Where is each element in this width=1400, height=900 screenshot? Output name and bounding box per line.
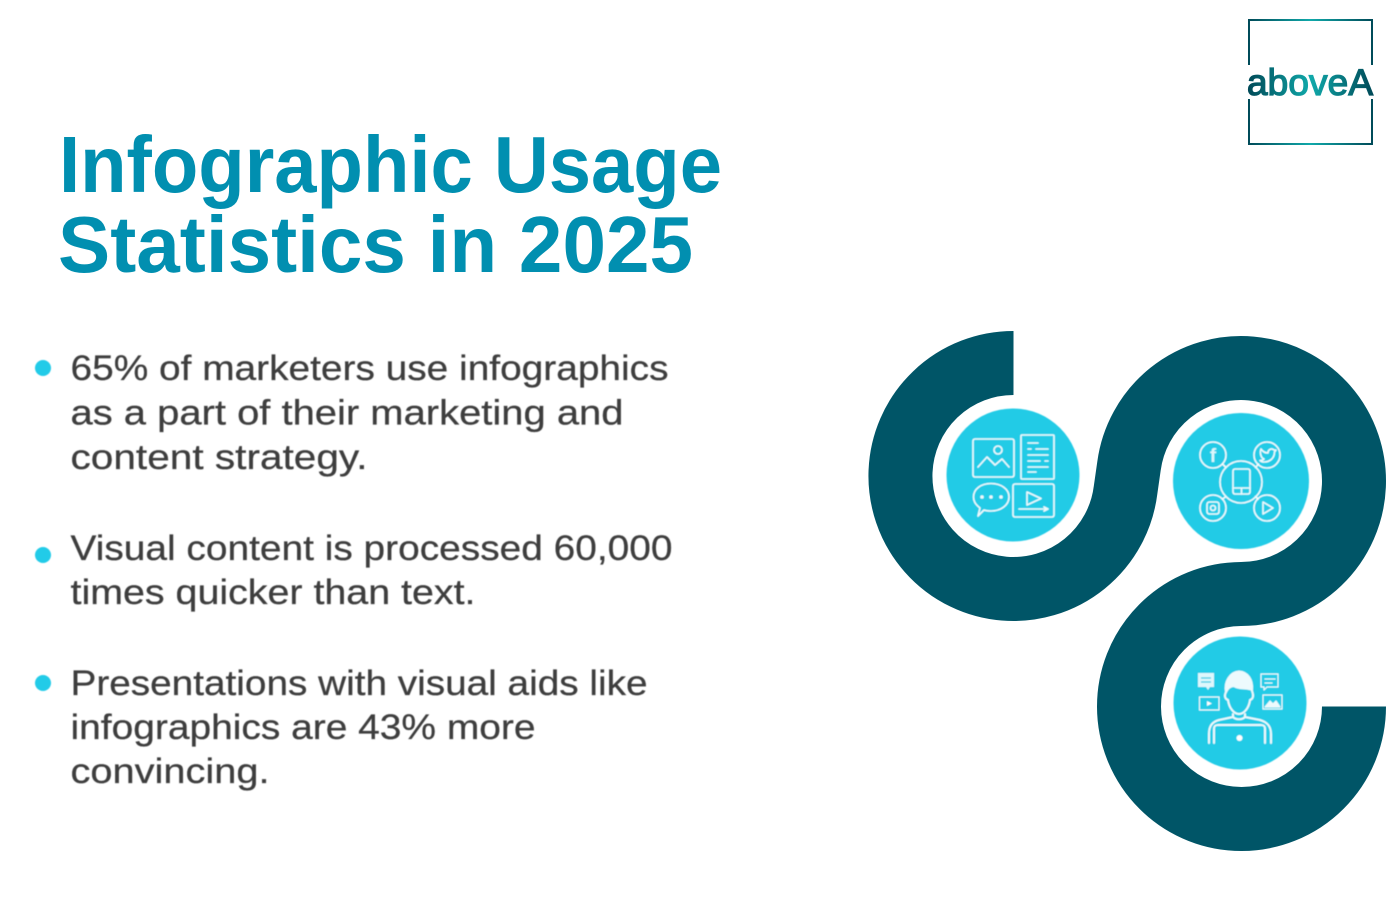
play button	[1254, 495, 1280, 521]
facebook glyph: f	[1210, 446, 1217, 467]
person	[1209, 672, 1271, 743]
instagram	[1200, 495, 1226, 521]
icon circle: social media	[1173, 413, 1309, 549]
logo: aboveA	[1247, 20, 1373, 144]
bullet 3: convincing.	[70, 752, 270, 791]
twitter	[1254, 442, 1280, 468]
bullet 1: content strategy.	[70, 438, 368, 477]
chat bubble	[974, 484, 1009, 516]
small image	[1263, 695, 1282, 709]
bullet 1: 65% of marketers use infographics	[70, 349, 668, 388]
title	[58, 120, 722, 289]
bullet 3: Presentations with visual aids like	[70, 664, 648, 703]
filled message	[1198, 673, 1214, 690]
title line 1: Infographic Usage	[59, 120, 722, 209]
message lines	[1201, 678, 1211, 682]
bullet 2	[35, 529, 672, 612]
bullet 1	[35, 349, 668, 477]
ribbon graphic with icons	[900, 363, 1354, 819]
icon circle: visual content	[946, 408, 1080, 542]
picture frame	[973, 439, 1014, 477]
bullet 3	[35, 664, 648, 791]
bullet 1: as a part of their marketing and	[70, 394, 624, 432]
small video	[1200, 697, 1219, 710]
video player	[1013, 484, 1054, 517]
bullet 2: Visual content is processed 60,000	[70, 529, 672, 568]
video play	[1207, 701, 1212, 706]
laptop dot	[1236, 735, 1242, 741]
logo wordmark: aboveA	[1247, 62, 1373, 103]
facebook	[1200, 442, 1226, 468]
phone hub	[1220, 461, 1262, 503]
document	[1021, 435, 1054, 479]
teal S-curve ribbon	[900, 363, 1354, 819]
bullet 3: infographics are 43% more	[70, 708, 536, 747]
bullet list	[35, 349, 672, 791]
outlined message	[1261, 674, 1278, 690]
bullet 2: times quicker than text.	[70, 573, 476, 612]
icon circle: person with laptop	[1174, 636, 1306, 770]
title line 2: Statistics in 2025	[58, 200, 693, 289]
